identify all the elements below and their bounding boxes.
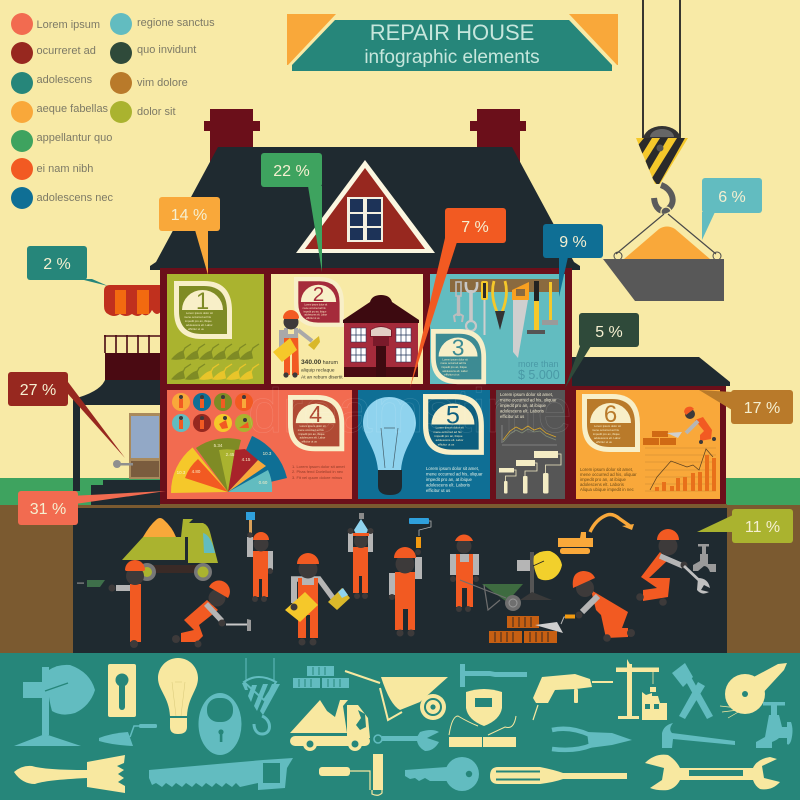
dump truck: [122, 518, 218, 581]
badge 2: adolescens elt. Labor: [304, 314, 327, 317]
badge 5: adolescens elt. Labor: [436, 438, 463, 442]
callout 27 percent: [8, 372, 125, 458]
icon: claw hammer: [662, 723, 735, 748]
worker laying bricks: [535, 571, 635, 642]
room: rollers and line chart: Lorem ipsum dolor sit amet,: [500, 392, 553, 397]
budget figure: more than: [518, 359, 559, 369]
concrete mixer: [517, 551, 562, 600]
badge 1: Lorem ipsum dolor sit: [186, 311, 213, 315]
legend: appellantur quo: [36, 132, 112, 144]
badge 5: impedit pro an, ibique: [435, 434, 463, 438]
callout 11 percent: 11 %: [745, 519, 780, 536]
badge 5: mene occurred ad his: [434, 430, 462, 434]
badge 5: 5: [446, 401, 460, 429]
icon: crossed hammers: [672, 663, 713, 719]
badge 3: [431, 329, 486, 384]
cost chart: [645, 448, 716, 491]
room 5 text: Lorem ipsum dolor sit amet,: [426, 466, 479, 471]
icon: angle grinder: [720, 663, 787, 718]
icon: concrete mixer: [14, 665, 95, 746]
house frame: [160, 268, 726, 506]
paint rollers: [499, 451, 561, 494]
callout 6 percent: [702, 178, 762, 240]
fan chart: 10.3: [177, 470, 186, 475]
badge 4: [288, 395, 344, 451]
badge 5: efficitur ut us: [438, 442, 455, 446]
spanners: [454, 282, 477, 331]
room 5 text: [426, 466, 483, 493]
badge 6: [582, 394, 640, 452]
worker with wrench and tap: [636, 529, 716, 606]
room 6 text: mene occurred ad his, oliquar: [580, 472, 637, 477]
room 2 figures: [301, 359, 343, 380]
legend: adolescens: [36, 74, 93, 86]
icon: light bulb: [158, 658, 198, 734]
chart notes: 1. Lorem ipsum dolor sit amet: [292, 464, 346, 469]
callout 31 percent: [18, 491, 166, 525]
badge 4: impedit pro an, ibique: [299, 432, 325, 436]
legend: ocurreret ad: [36, 45, 96, 57]
legend: aeque fabellas: [36, 103, 109, 115]
worker with wheelbarrow: [450, 535, 523, 612]
legend: vim dolore: [137, 77, 188, 89]
chart notes: [292, 464, 346, 480]
room: rollers and line chart: mene occurred ad his, oliquar: [500, 398, 557, 402]
badge 2: [294, 277, 344, 327]
small worker icons: [172, 393, 253, 432]
room 1: trowels: [167, 274, 264, 384]
callout 14 percent: 14 %: [171, 207, 207, 224]
badge 3: efficitur ut us: [444, 373, 460, 377]
title banner: REPAIR HOUSE: [370, 20, 534, 45]
badge 1: efficitur ut us: [188, 327, 204, 331]
callout 5 percent: 5 %: [595, 324, 623, 341]
badge 3: impedit pro an, ibique: [441, 365, 467, 369]
wrench: [684, 566, 710, 594]
floor strip: [160, 504, 727, 507]
fan chart: 4.80: [192, 469, 201, 474]
icon: screwdriver: [490, 767, 627, 784]
room 5 text: adolescens elt. Laboris: [426, 482, 470, 488]
callout 2 percent: [27, 246, 108, 286]
callout 11 percent: [697, 509, 793, 543]
badge 1: adolescens elt. Labor: [186, 323, 213, 327]
badge 6: adolescens elt. Labor: [594, 436, 621, 440]
badge 1: [174, 281, 232, 339]
small line chart: [502, 425, 557, 445]
icon: tower crane and building: [616, 659, 667, 720]
legend: dolor sit: [137, 106, 176, 118]
fan chart: 0.60: [259, 480, 268, 485]
room 6 text: Aliqua ubique impedit in nec: [580, 487, 635, 492]
room 6 text: [580, 467, 637, 492]
ground: grass and soil: [0, 478, 800, 655]
screwdriver: [481, 281, 488, 335]
dormer window: [296, 160, 435, 253]
badge 1: impedit pro an, ibique: [185, 319, 212, 323]
chart notes: 2. Phas fend Doriellud in nec: [292, 469, 343, 474]
room 2: estimate and brick house: [271, 274, 423, 384]
room 5 text: mene occurred ad his, oliquar: [426, 472, 483, 476]
badge 4: efficitur ut us: [302, 440, 318, 444]
worker with brush: [246, 512, 273, 602]
icon: power drill: [533, 674, 613, 720]
bricks: [643, 431, 676, 445]
room 2 figures: 340.00 harum: [301, 359, 338, 366]
room 3: tool board: [430, 274, 565, 384]
callout 7 percent: 7 %: [461, 219, 489, 236]
icon: pliers: [552, 729, 632, 750]
room: rollers and line chart: [496, 390, 565, 499]
badge 2: mene occurred ad his: [303, 307, 326, 310]
wheelbarrow: [460, 580, 523, 611]
trowel rows: [172, 344, 259, 379]
title banner: [287, 14, 618, 71]
badge 6: mene occurred ad his: [592, 428, 619, 432]
legend: [11, 13, 215, 209]
right extension roof: [572, 357, 730, 386]
callout 27 percent: 27 %: [20, 382, 56, 399]
badge 4: mene occurred ad his: [298, 428, 324, 432]
badge 5: Lorem ipsum dolor sit: [436, 426, 464, 430]
legend: adolescens nec: [36, 192, 113, 204]
badge 3: mene occurred ad his: [440, 361, 467, 365]
fan chart: [171, 436, 287, 493]
icon: paint brush: [14, 755, 125, 793]
room 5 text: efficitur ut us: [426, 488, 450, 493]
icon: paint roller: [319, 754, 383, 795]
room 6 text: Lorem ipsum dolor sit amet,: [580, 467, 633, 472]
crane hook with load: [603, 0, 724, 301]
icon: water tap: [756, 702, 792, 748]
room 6: bricklayer and cost chart: [576, 390, 720, 499]
callout 7 percent: [410, 208, 506, 388]
worker holding bulb: [348, 513, 374, 599]
chart notes: 3. Fit vel quum dolore minus: [292, 475, 342, 480]
room: rollers and line chart: efficitur ut us: [500, 414, 524, 419]
badge 2: Lorem ipsum dolor sit: [304, 303, 328, 306]
callout 17 percent: [699, 390, 793, 424]
hand saw: [512, 282, 529, 358]
callout 6 percent: 6 %: [718, 189, 746, 206]
callout 22 percent: 22 %: [273, 163, 310, 180]
room 6 text: impedit pro an, at ibique: [580, 477, 626, 482]
icon: hand saw: [149, 758, 293, 790]
callout 9 percent: [543, 224, 603, 297]
legend: Lorem ipsum: [36, 19, 100, 31]
worker with paint roller: [389, 518, 431, 636]
icon: hammer: [460, 664, 527, 687]
icon: adjustable wrench: [374, 730, 439, 751]
badge 4: Lorem ipsum dolor sit: [300, 424, 326, 428]
callout 14 percent: [159, 197, 220, 275]
room 5: light bulb: [358, 390, 490, 499]
hammers: [527, 281, 558, 334]
roof: [150, 147, 580, 270]
fan chart: 2.45: [226, 452, 235, 457]
room 5 text: impedit pro an, at ibique: [426, 477, 472, 482]
legend: ei nam nibh: [36, 163, 93, 175]
callout 17 percent: 17 %: [744, 400, 780, 417]
badge 2: 2: [313, 283, 324, 306]
icon: welding mask: [449, 689, 516, 747]
icon: crane hook: [242, 658, 280, 734]
small brick house: [343, 295, 419, 377]
fan chart: 10.3: [263, 451, 272, 456]
worker with folder and calculator: [285, 553, 350, 646]
badge 2: impedit pro an, ibique: [303, 310, 327, 313]
badge 3: Lorem ipsum dolor sit: [442, 357, 468, 361]
icon: trowel: [99, 724, 157, 746]
budget figure: $ 5.000: [518, 368, 560, 382]
chimneys: [204, 109, 526, 169]
badge 6: efficitur ut us: [596, 440, 612, 444]
watermark: dreamstime: [248, 377, 572, 446]
callout 9 percent: 9 %: [559, 234, 587, 251]
worker with drill: [77, 560, 145, 648]
pliers: [493, 281, 506, 330]
room 4: pie chart: [167, 390, 352, 499]
room 6 text: adolescens elt. Laboris: [580, 482, 624, 487]
callout 22 percent: [261, 153, 322, 272]
room 2 figures: aliquip reclaque: [301, 368, 335, 374]
brick stack: [489, 616, 557, 643]
badge 6: impedit pro an, ibique: [593, 432, 620, 436]
worker with folder: [273, 310, 320, 378]
fan chart: 4.15: [242, 457, 251, 462]
room 2 figures: At an rebum disertit: [301, 374, 343, 380]
room: rollers and line chart: impedit pro an, at ibique: [500, 403, 546, 408]
icon: keyhole plate: [108, 664, 136, 717]
room: rollers and line chart: adolescens elt. Laboris: [500, 408, 544, 414]
callout 2 percent: 2 %: [43, 256, 71, 273]
badge 6: Lorem ipsum dolor sit: [594, 424, 621, 428]
basement panel: [73, 508, 727, 653]
badge 1: 1: [196, 288, 209, 315]
badge 4: 4: [309, 401, 322, 427]
excavator: [558, 514, 634, 554]
badge 1: mene occurred ad his: [184, 315, 211, 319]
kneeling worker with hammer: [172, 581, 251, 648]
title banner: infographic elements: [364, 47, 540, 68]
badge 2: efficitur ut us: [306, 317, 320, 320]
legend: regione sanctus: [137, 17, 215, 29]
budget figure: [518, 359, 560, 382]
tap: [693, 544, 716, 572]
side porch and awning: [73, 285, 163, 505]
icon: dump truck: [290, 700, 370, 751]
bottom tools panel: [0, 653, 800, 800]
icon: padlock: [198, 693, 242, 755]
fan chart: 5.34: [214, 443, 223, 448]
badge 3: adolescens elt. Labor: [442, 369, 468, 373]
small bricklayer: [667, 407, 716, 444]
badge 6: 6: [604, 401, 617, 428]
badge 4: adolescens elt. Labor: [300, 436, 325, 440]
badge 5: [423, 394, 484, 455]
callout 31 percent: 31 %: [30, 501, 66, 518]
badge 3: 3: [452, 335, 464, 361]
icon: bricks: [293, 666, 349, 688]
icon: double open spanner: [645, 755, 780, 790]
icon: key: [405, 757, 479, 791]
legend: quo invidunt: [137, 44, 196, 56]
icon: wheelbarrow: [345, 671, 448, 720]
callout 5 percent: [565, 313, 639, 388]
